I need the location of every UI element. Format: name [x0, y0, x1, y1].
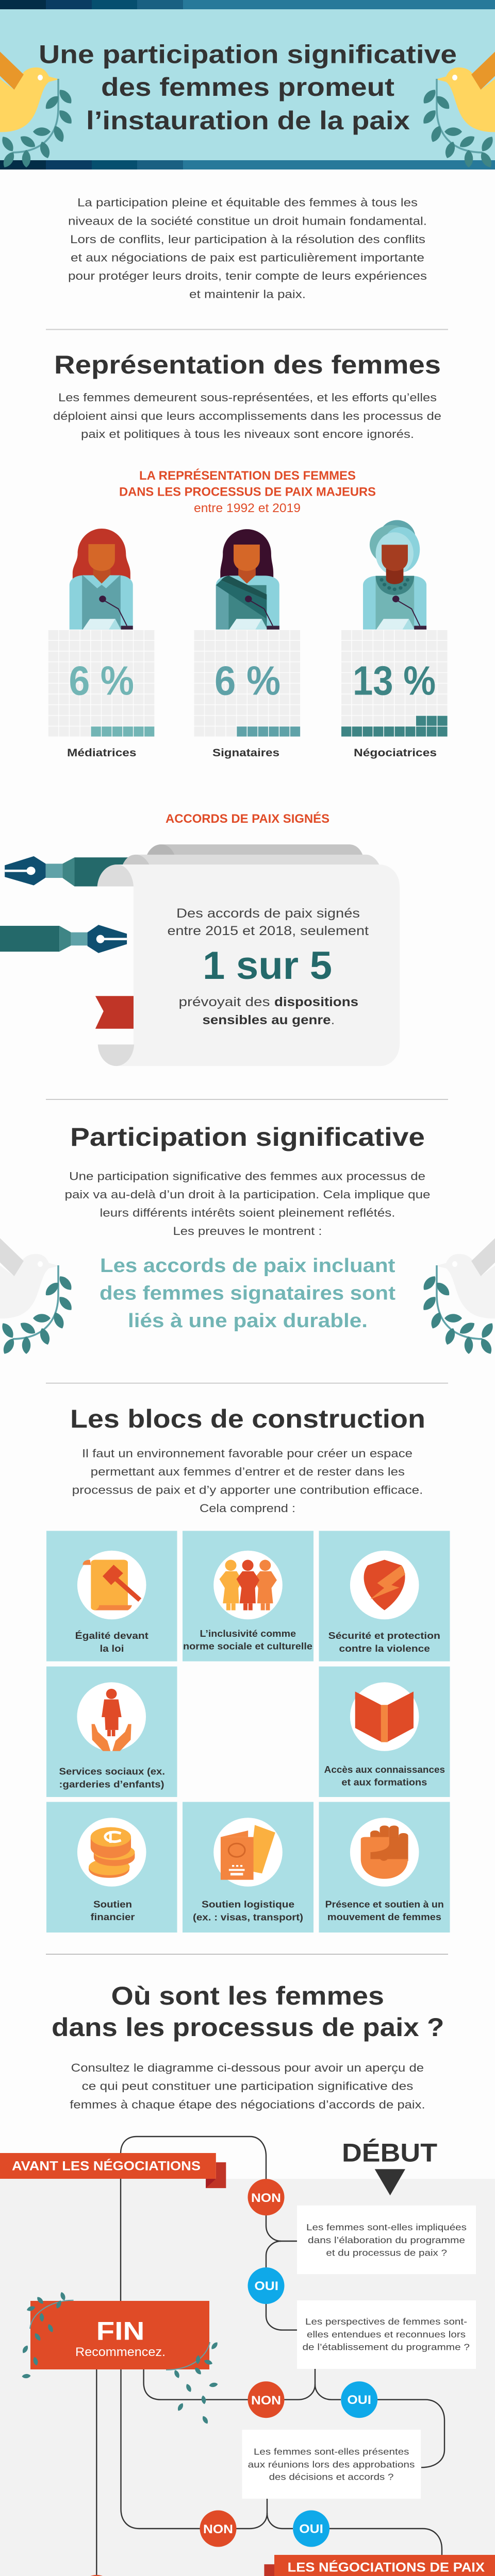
icon: right grey dove [420, 1238, 495, 1356]
question box 1 [297, 2206, 476, 2274]
label: Accès aux connaissances [324, 1765, 445, 1775]
title: des femmes promeut [101, 73, 394, 101]
chart: mediatrices grid 6%: 6 % [69, 657, 134, 704]
label: L’inclusivité comme [200, 1629, 296, 1639]
intro text [68, 196, 427, 301]
label: la loi [100, 1643, 124, 1654]
text block: paix va au-delà d’un droit à la participation. Cela implique que [65, 1188, 430, 1201]
icon: right dove with olive branch [420, 52, 495, 170]
text block: déploient ainsi que leurs accomplissements dans les processus de [53, 410, 441, 422]
callout: 1 sur 5: prévoyait des [178, 995, 270, 1009]
node: non 3: NON [251, 2394, 281, 2408]
node: non 2 [78, 2575, 115, 2576]
intro text: et aux négociations de paix est particulièrement importante [71, 251, 424, 264]
heading: ou sont les femmes: dans les processus de paix ? [52, 2013, 444, 2042]
icon: woman in hands [92, 1689, 131, 1751]
question box 2: elles entendues et reconnues lors [307, 2329, 466, 2340]
heading: ou sont les femmes [52, 1981, 444, 2042]
node: non 4 [200, 2510, 236, 2547]
panel: participation significative [0, 1123, 495, 1356]
heading: ou sont les femmes: Où sont les femmes [111, 1981, 384, 2010]
node: oui 3: OUI [347, 2393, 371, 2407]
panel: fin recommencez [21, 2292, 219, 2425]
callout: durable peace: liés à une paix durable. [128, 1310, 368, 1332]
icon: book [355, 1691, 414, 1742]
label [328, 1631, 440, 1654]
text block: permettant aux femmes d’entrer et de rester dans les [91, 1465, 405, 1478]
text block: Cela comprend : [200, 1502, 295, 1515]
label [325, 1900, 444, 1922]
label: et aux formations [341, 1777, 427, 1787]
text block: Il faut un environnement favorable pour créer un espace [82, 1447, 412, 1460]
chart: negociatrices grid 13%: Négociatrices [354, 747, 437, 759]
question box 1: et du processus de paix ? [326, 2248, 447, 2258]
text block: ce qui peut constituer une participation significative des [82, 2079, 413, 2093]
heading: debut: DÉBUT [342, 2138, 437, 2167]
chart: negociatrices grid 13% [341, 630, 448, 759]
label [91, 1900, 135, 1922]
banner: avant les negociations: AVANT LES NÉGOCIATIONS [12, 2159, 201, 2174]
icon: three women [219, 1560, 277, 1611]
text block: Consultez le diagramme ci-dessous pour avoir un aperçu de [71, 2061, 424, 2074]
question box 3: aux réunions lors des approbations [248, 2459, 415, 2469]
icon: pen and scroll [0, 844, 400, 1066]
label: Soutien [93, 1900, 132, 1910]
question box 1: dans l’élaboration du programme [308, 2235, 465, 2245]
chart heading: DANS LES PROCESSUS DE PAIX MAJEURS [119, 485, 376, 499]
label: contre la violence [339, 1643, 430, 1654]
node: non 1: NON [251, 2191, 281, 2205]
card: acces aux connaissances [319, 1667, 450, 1797]
text block: processus de paix et d’y apporter une contribution efficace. [72, 1483, 423, 1496]
callout: 1 sur 5 [167, 906, 369, 1027]
node: non 1 [248, 2179, 285, 2215]
arrow: flowchart connector lines [43, 2137, 482, 2576]
icon: left grey dove [0, 1238, 75, 1356]
question box 2: Les perspectives de femmes sont- [305, 2316, 467, 2327]
node: oui 1: OUI [254, 2279, 278, 2293]
card: soutien financier [46, 1802, 177, 1933]
icon: left dove with olive branch [0, 52, 75, 170]
icon: coins [89, 1827, 135, 1878]
question box 2 [297, 2300, 476, 2369]
node: oui 3 [341, 2381, 377, 2418]
header banner [0, 0, 495, 170]
panel: flowchart background [0, 2179, 495, 2576]
chart: signataires grid 6%: 6 % [214, 657, 280, 704]
decoration: leaves around fin [21, 2292, 219, 2425]
question box 3: des décisions et accords ? [269, 2471, 394, 2482]
intro text: niveaux de la société constitue un droit humain fondamental. [68, 214, 427, 227]
heading: Représentation des femmes [54, 350, 441, 379]
text block: leurs différents intérêts soient pleinement reflétés. [100, 1206, 395, 1219]
text block: Les femmes demeurent sous-représentées, et les efforts qu’elles [58, 391, 437, 404]
node: oui 4 [293, 2510, 329, 2547]
banner: avant les negociations [0, 2153, 226, 2188]
label [75, 1630, 148, 1654]
card: services sociaux [46, 1667, 177, 1797]
question box 2: de l’établissement du programme ? [302, 2342, 470, 2352]
label: Présence et soutien à un [325, 1900, 444, 1910]
callout: durable peace: Les accords de paix incluant [100, 1255, 395, 1277]
chart: mediatrices grid 6% [48, 630, 155, 759]
panel: fin recommencez: Recommencez. [75, 2345, 166, 2359]
node: oui 1 [248, 2267, 285, 2304]
callout: 1 sur 5: entre 2015 et 2018, seulement [167, 924, 369, 938]
callout: 1 sur 5: sensibles au genre [202, 1013, 331, 1027]
icon: scroll and gavel [82, 1560, 140, 1611]
icon: woman negotiator [363, 520, 426, 630]
text block [70, 2061, 425, 2111]
panel: les blocs de construction [46, 1404, 450, 1933]
card: mouvement de femmes [319, 1802, 450, 1933]
text block: Une participation significative des femmes aux processus de [69, 1170, 425, 1183]
chart heading: entre 1992 et 2019 [194, 501, 301, 515]
label: financier [91, 1912, 135, 1922]
intro text: et maintenir la paix. [189, 288, 306, 301]
banner: les negociations de paix [264, 2555, 495, 2576]
icon: shield [364, 1560, 405, 1611]
heading: debut [342, 2138, 437, 2195]
icon: woman mediator [70, 529, 133, 630]
panel: representation des femmes [0, 350, 448, 1066]
heading: accords de paix: ACCORDS DE PAIX SIGNÉS [166, 811, 329, 826]
question box 1: Les femmes sont-elles impliquées [306, 2222, 467, 2232]
title [39, 40, 457, 135]
callout: 1 sur 5: . [331, 1013, 335, 1027]
text block: femmes à chaque étape des négociations d’accords de paix. [70, 2098, 425, 2111]
chart: mediatrices grid 6%: Médiatrices [67, 747, 136, 759]
label [324, 1765, 445, 1787]
label: Égalité devant [75, 1630, 148, 1641]
title: Une participation significative [39, 40, 457, 69]
label: Sécurité et protection [328, 1631, 440, 1641]
callout: 1 sur 5: dispositions [274, 995, 358, 1009]
label: Services sociaux (ex. [59, 1767, 165, 1777]
label: Soutien logistique [202, 1900, 294, 1910]
heading: Les blocs de construction [70, 1404, 425, 1433]
label [183, 1629, 312, 1652]
chart: negociatrices grid 13%: 13 % [353, 657, 436, 704]
panel: fin recommencez: FIN [96, 2316, 144, 2345]
chart: signataires grid 6%: Signataires [212, 747, 279, 759]
chart: signataires grid 6% [194, 630, 301, 759]
title: l’instauration de la paix [86, 106, 410, 135]
callout: durable peace [100, 1255, 395, 1332]
node: non 3 [248, 2381, 285, 2418]
icon: raised fist [361, 1825, 408, 1879]
text block: Les preuves le montrent : [173, 1225, 322, 1238]
node: oui 4: OUI [299, 2522, 323, 2536]
label: (ex. : visas, transport) [193, 1912, 303, 1922]
label: :garderies d’enfants) [59, 1780, 164, 1790]
intro text: pour protéger leurs droits, tenir compte de leurs expériences [68, 269, 427, 282]
text block: paix et politiques à tous les niveaux sont encore ignorés. [81, 428, 414, 440]
node: non 4: NON [203, 2522, 233, 2536]
icon: woman signatory [216, 529, 279, 630]
card: securite [319, 1531, 450, 1662]
label: mouvement de femmes [327, 1912, 441, 1922]
callout: 1 sur 5: Des accords de paix signés [176, 906, 360, 921]
label [59, 1767, 165, 1790]
text block [53, 391, 441, 440]
label: norme sociale et culturelle [183, 1641, 312, 1652]
callout: durable peace: des femmes signataires sont [100, 1283, 395, 1304]
text block [72, 1447, 423, 1515]
intro text: Lors de conflits, leur participation à la résolution des conflits [70, 233, 425, 246]
chart heading: LA REPRÉSENTATION DES FEMMES [139, 468, 356, 483]
intro text: La participation pleine et équitable des femmes à tous les [77, 196, 418, 209]
chart heading [119, 468, 376, 515]
text block [65, 1170, 430, 1238]
callout: 1 sur 5: 1 sur 5 [203, 944, 332, 988]
card: inclusivite [183, 1531, 314, 1662]
heading: Participation significative [70, 1123, 425, 1151]
card: egalite devant la loi [46, 1531, 177, 1662]
card: soutien logistique [183, 1802, 314, 1933]
question box 3 [242, 2430, 421, 2499]
banner: les negociations de paix: LES NÉGOCIATIONS DE PAIX [288, 2560, 485, 2574]
question box 3: Les femmes sont-elles présentes [254, 2446, 409, 2456]
label [193, 1900, 303, 1922]
icon: passport and ticket [221, 1825, 275, 1880]
